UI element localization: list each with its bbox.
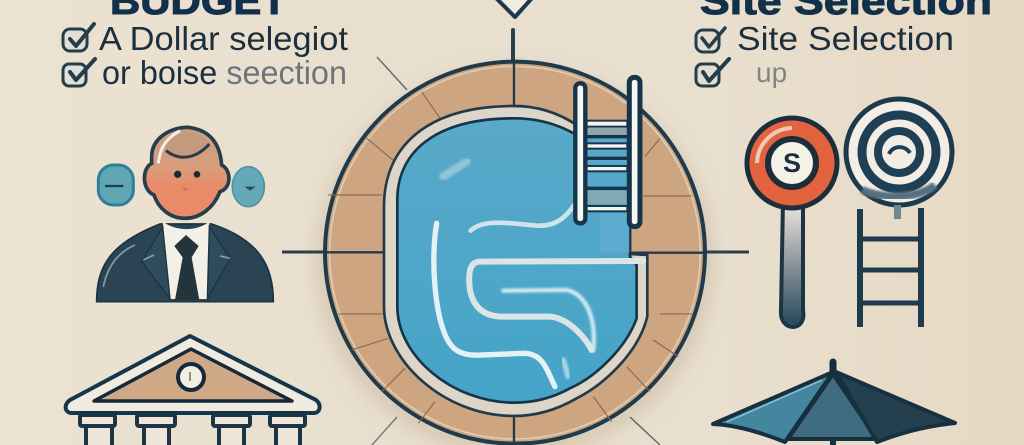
head — [144, 127, 229, 218]
list item: or boise seection: or boise seection — [102, 54, 347, 91]
connector lines — [282, 30, 749, 445]
jacket lapels — [142, 227, 230, 299]
water swirls — [434, 162, 643, 387]
checkbox 1 — [63, 24, 94, 51]
list item: A Dollar selegiot: A Dollar selegiot — [99, 20, 348, 57]
shirt — [163, 222, 209, 299]
columns — [80, 415, 305, 445]
budget checklist — [63, 20, 348, 91]
torso — [97, 224, 273, 302]
side badge left — [98, 165, 133, 205]
checkbox 2 — [696, 59, 729, 86]
pool deck ring — [325, 62, 705, 445]
highlight — [727, 380, 822, 422]
pole — [830, 440, 836, 445]
middle panel — [788, 374, 877, 439]
water tile patch — [600, 213, 629, 253]
checkbox 1 — [696, 28, 725, 52]
list item: up: up — [756, 57, 787, 88]
water — [397, 118, 637, 403]
lapel and jacket highlights — [103, 245, 230, 287]
icon: businessman — [97, 127, 273, 302]
site selection checklist — [696, 20, 954, 88]
handle — [781, 200, 803, 327]
icon: target — [846, 99, 952, 219]
icon: ladder — [860, 208, 921, 327]
checkbox 2 — [63, 59, 95, 86]
central pool illustration — [325, 62, 705, 445]
tie — [174, 235, 199, 300]
lens — [747, 118, 837, 208]
icon: umbrella — [713, 362, 955, 445]
pool ladder — [575, 77, 640, 227]
dollar letter: S — [783, 148, 801, 178]
pool frame — [384, 106, 647, 416]
list item: Site Selection: Site Selection — [737, 20, 954, 57]
right panel — [836, 372, 955, 442]
left panel — [713, 372, 833, 442]
pediment — [94, 349, 292, 401]
icon: shield tip — [495, 0, 533, 17]
icon: bank building — [66, 336, 320, 445]
side badge right — [232, 167, 264, 207]
roof — [66, 336, 320, 413]
icon: magnifier — [747, 118, 837, 327]
clock — [178, 364, 204, 390]
